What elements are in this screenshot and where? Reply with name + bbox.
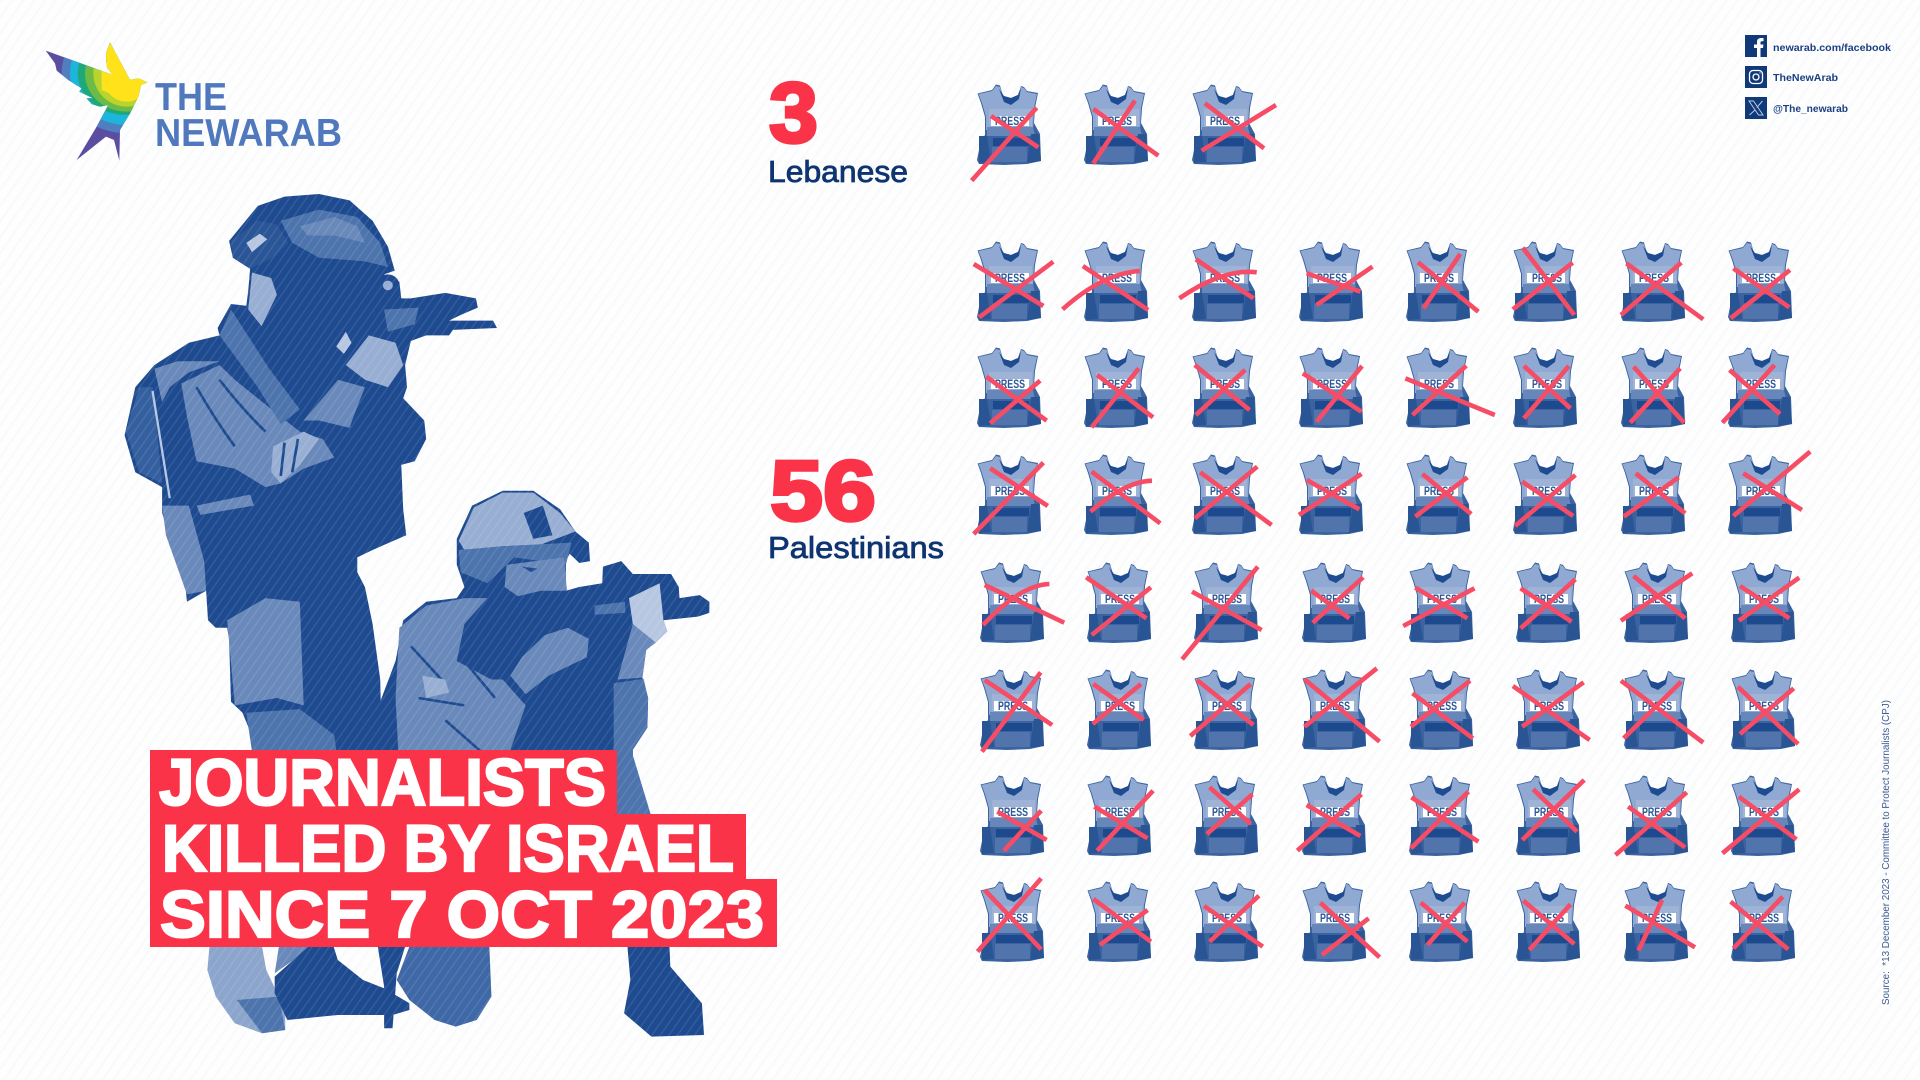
vests: Palestinian row 1: PRESS (1746, 273, 1776, 285)
number 56: 56 (770, 444, 876, 539)
facebook link: newarab.com/facebook (1773, 42, 1891, 54)
logo wordmark: NEWARAB (155, 112, 342, 155)
stat: 56 Palestinians (768, 444, 944, 565)
stat: 3 Lebanese (768, 66, 908, 189)
vests: Palestinian row 4: PRESS (1427, 594, 1457, 606)
vests: Palestinian row 1: PRESS (1532, 273, 1562, 285)
vests: Palestinian row 2: PRESS (1317, 379, 1347, 391)
vests: Palestinian row 3: PRESS (1746, 486, 1776, 498)
vests: Palestinian row 5: PRESS (1642, 701, 1672, 713)
lower legs and boots (207, 740, 704, 1037)
vests: Palestinian row 2: PRESS (1532, 379, 1562, 391)
icon: facebook (1745, 35, 1767, 57)
vests: Palestinian row 7: PRESS (1534, 913, 1564, 925)
vests: Palestinian row 4: PRESS (1320, 594, 1350, 606)
number 3: 3 (769, 66, 818, 161)
vests: Palestinian row 4: PRESS (1749, 594, 1779, 606)
vests: Palestinian row 2: PRESS (1639, 379, 1669, 391)
vests: Palestinian row 6: PRESS (1427, 807, 1457, 819)
vests: Palestinian row 3: PRESS (1210, 486, 1240, 498)
vests: Palestinian row 7 (978, 878, 1795, 962)
vests: Lebanese row: PRESS (1210, 116, 1240, 128)
vests: Palestinian row 3 (974, 452, 1810, 535)
vests: Palestinian row 3: PRESS (995, 486, 1025, 498)
vests: Palestinian row 2: PRESS (1746, 379, 1776, 391)
vests: Palestinian row 3: PRESS (1532, 486, 1562, 498)
vests: Palestinian row 4: PRESS (1642, 594, 1672, 606)
vests: Palestinian row 6: PRESS (1749, 807, 1779, 819)
icon: X (1745, 97, 1767, 119)
vests: Palestinian row 7: PRESS (998, 913, 1028, 925)
vests: Palestinian row 1: PRESS (1424, 273, 1454, 285)
vests: Palestinian row 6: PRESS (998, 807, 1028, 819)
vests: Palestinian row 2 (977, 348, 1792, 428)
vests: Palestinian row 7: PRESS (1105, 913, 1135, 925)
standing soldier (125, 194, 497, 765)
vests: Palestinian row 6: PRESS (1212, 807, 1242, 819)
instagram handle: TheNewArab (1773, 72, 1838, 84)
icon: rainbow bird (46, 42, 148, 160)
source note: Source: *13 December 2023 - Committee to Protect Journalists (CPJ) (1881, 700, 1892, 1005)
vests: Palestinian row 3: PRESS (1317, 486, 1347, 498)
vests: Palestinian row 1: PRESS (995, 273, 1025, 285)
X handle: @The_newarab (1773, 103, 1848, 115)
vests: Palestinian row 1: PRESS (1317, 273, 1347, 285)
vests: Palestinian row 6: PRESS (1320, 807, 1350, 819)
red highlight blocks (150, 750, 777, 947)
vests: Palestinian row 3: PRESS (1424, 486, 1454, 498)
vests: Palestinian row 2: PRESS (995, 379, 1025, 391)
vests: Palestinian row 6 (980, 776, 1799, 856)
logo: The New Arab (46, 42, 340, 160)
vests: Palestinian row 4: PRESS (998, 594, 1028, 606)
soldier hatch overlay (120, 190, 720, 1050)
logo wordmark: THE (155, 76, 227, 119)
vests: Palestinian row 5: PRESS (1212, 701, 1242, 713)
vests: Palestinian row 7: PRESS (1427, 913, 1457, 925)
logo wordmark (155, 76, 342, 155)
vests: Palestinian row 1: PRESS (1210, 273, 1240, 285)
vests: Palestinian row 2: PRESS (1424, 379, 1454, 391)
vests: Palestinian row 7: PRESS (1749, 913, 1779, 925)
vests: Palestinian row 1: PRESS (1102, 273, 1132, 285)
vests: Palestinian row 5: PRESS (1749, 701, 1779, 713)
label Palestinians: Palestinians (768, 530, 944, 565)
vests: Palestinian row 4: PRESS (1212, 594, 1242, 606)
vests: Palestinian row 4 (980, 562, 1799, 659)
vests: Lebanese row (972, 84, 1276, 181)
vests: Palestinian row 5: PRESS (1534, 701, 1564, 713)
vests: Palestinian row 2: PRESS (1210, 379, 1240, 391)
vests: Palestinian row 5: PRESS (1320, 701, 1350, 713)
vests: Palestinian row 1 (974, 242, 1792, 322)
headline banner (150, 745, 777, 951)
vests: Lebanese row: PRESS (1102, 116, 1132, 128)
image: soldiers (120, 190, 720, 1050)
vests: Palestinian row 5: PRESS (1427, 701, 1457, 713)
label Lebanese: Lebanese (768, 154, 908, 189)
vests: Palestinian row 5 (980, 668, 1798, 752)
kneeling soldier (350, 491, 709, 772)
vests: Palestinian row 5: PRESS (1105, 701, 1135, 713)
vests: Palestinian row 6: PRESS (1105, 807, 1135, 819)
vests: Palestinian row 5: PRESS (998, 701, 1028, 713)
vests: Palestinian row 7: PRESS (1642, 913, 1672, 925)
headline text (159, 745, 764, 951)
headline text: KILLED BY ISRAEL (162, 811, 734, 885)
vests: Palestinian row 2: PRESS (1102, 379, 1132, 391)
social links (1745, 35, 1891, 119)
icon: instagram (1745, 66, 1767, 88)
headline text: SINCE 7 OCT 2023 (160, 877, 764, 951)
vests: Palestinian row 7: PRESS (1320, 913, 1350, 925)
vests: Palestinian row 3: PRESS (1102, 486, 1132, 498)
vests: Palestinian row 6: PRESS (1534, 807, 1564, 819)
vests: Palestinian row 4: PRESS (1105, 594, 1135, 606)
vests: Palestinian row 4: PRESS (1534, 594, 1564, 606)
vests: Palestinian row 7: PRESS (1212, 913, 1242, 925)
vests: Palestinian row 3: PRESS (1639, 486, 1669, 498)
vests: Lebanese row: PRESS (995, 116, 1025, 128)
vests: Palestinian row 1: PRESS (1639, 273, 1669, 285)
headline text: JOURNALISTS (159, 745, 606, 819)
vests: Palestinian row 6: PRESS (1642, 807, 1672, 819)
